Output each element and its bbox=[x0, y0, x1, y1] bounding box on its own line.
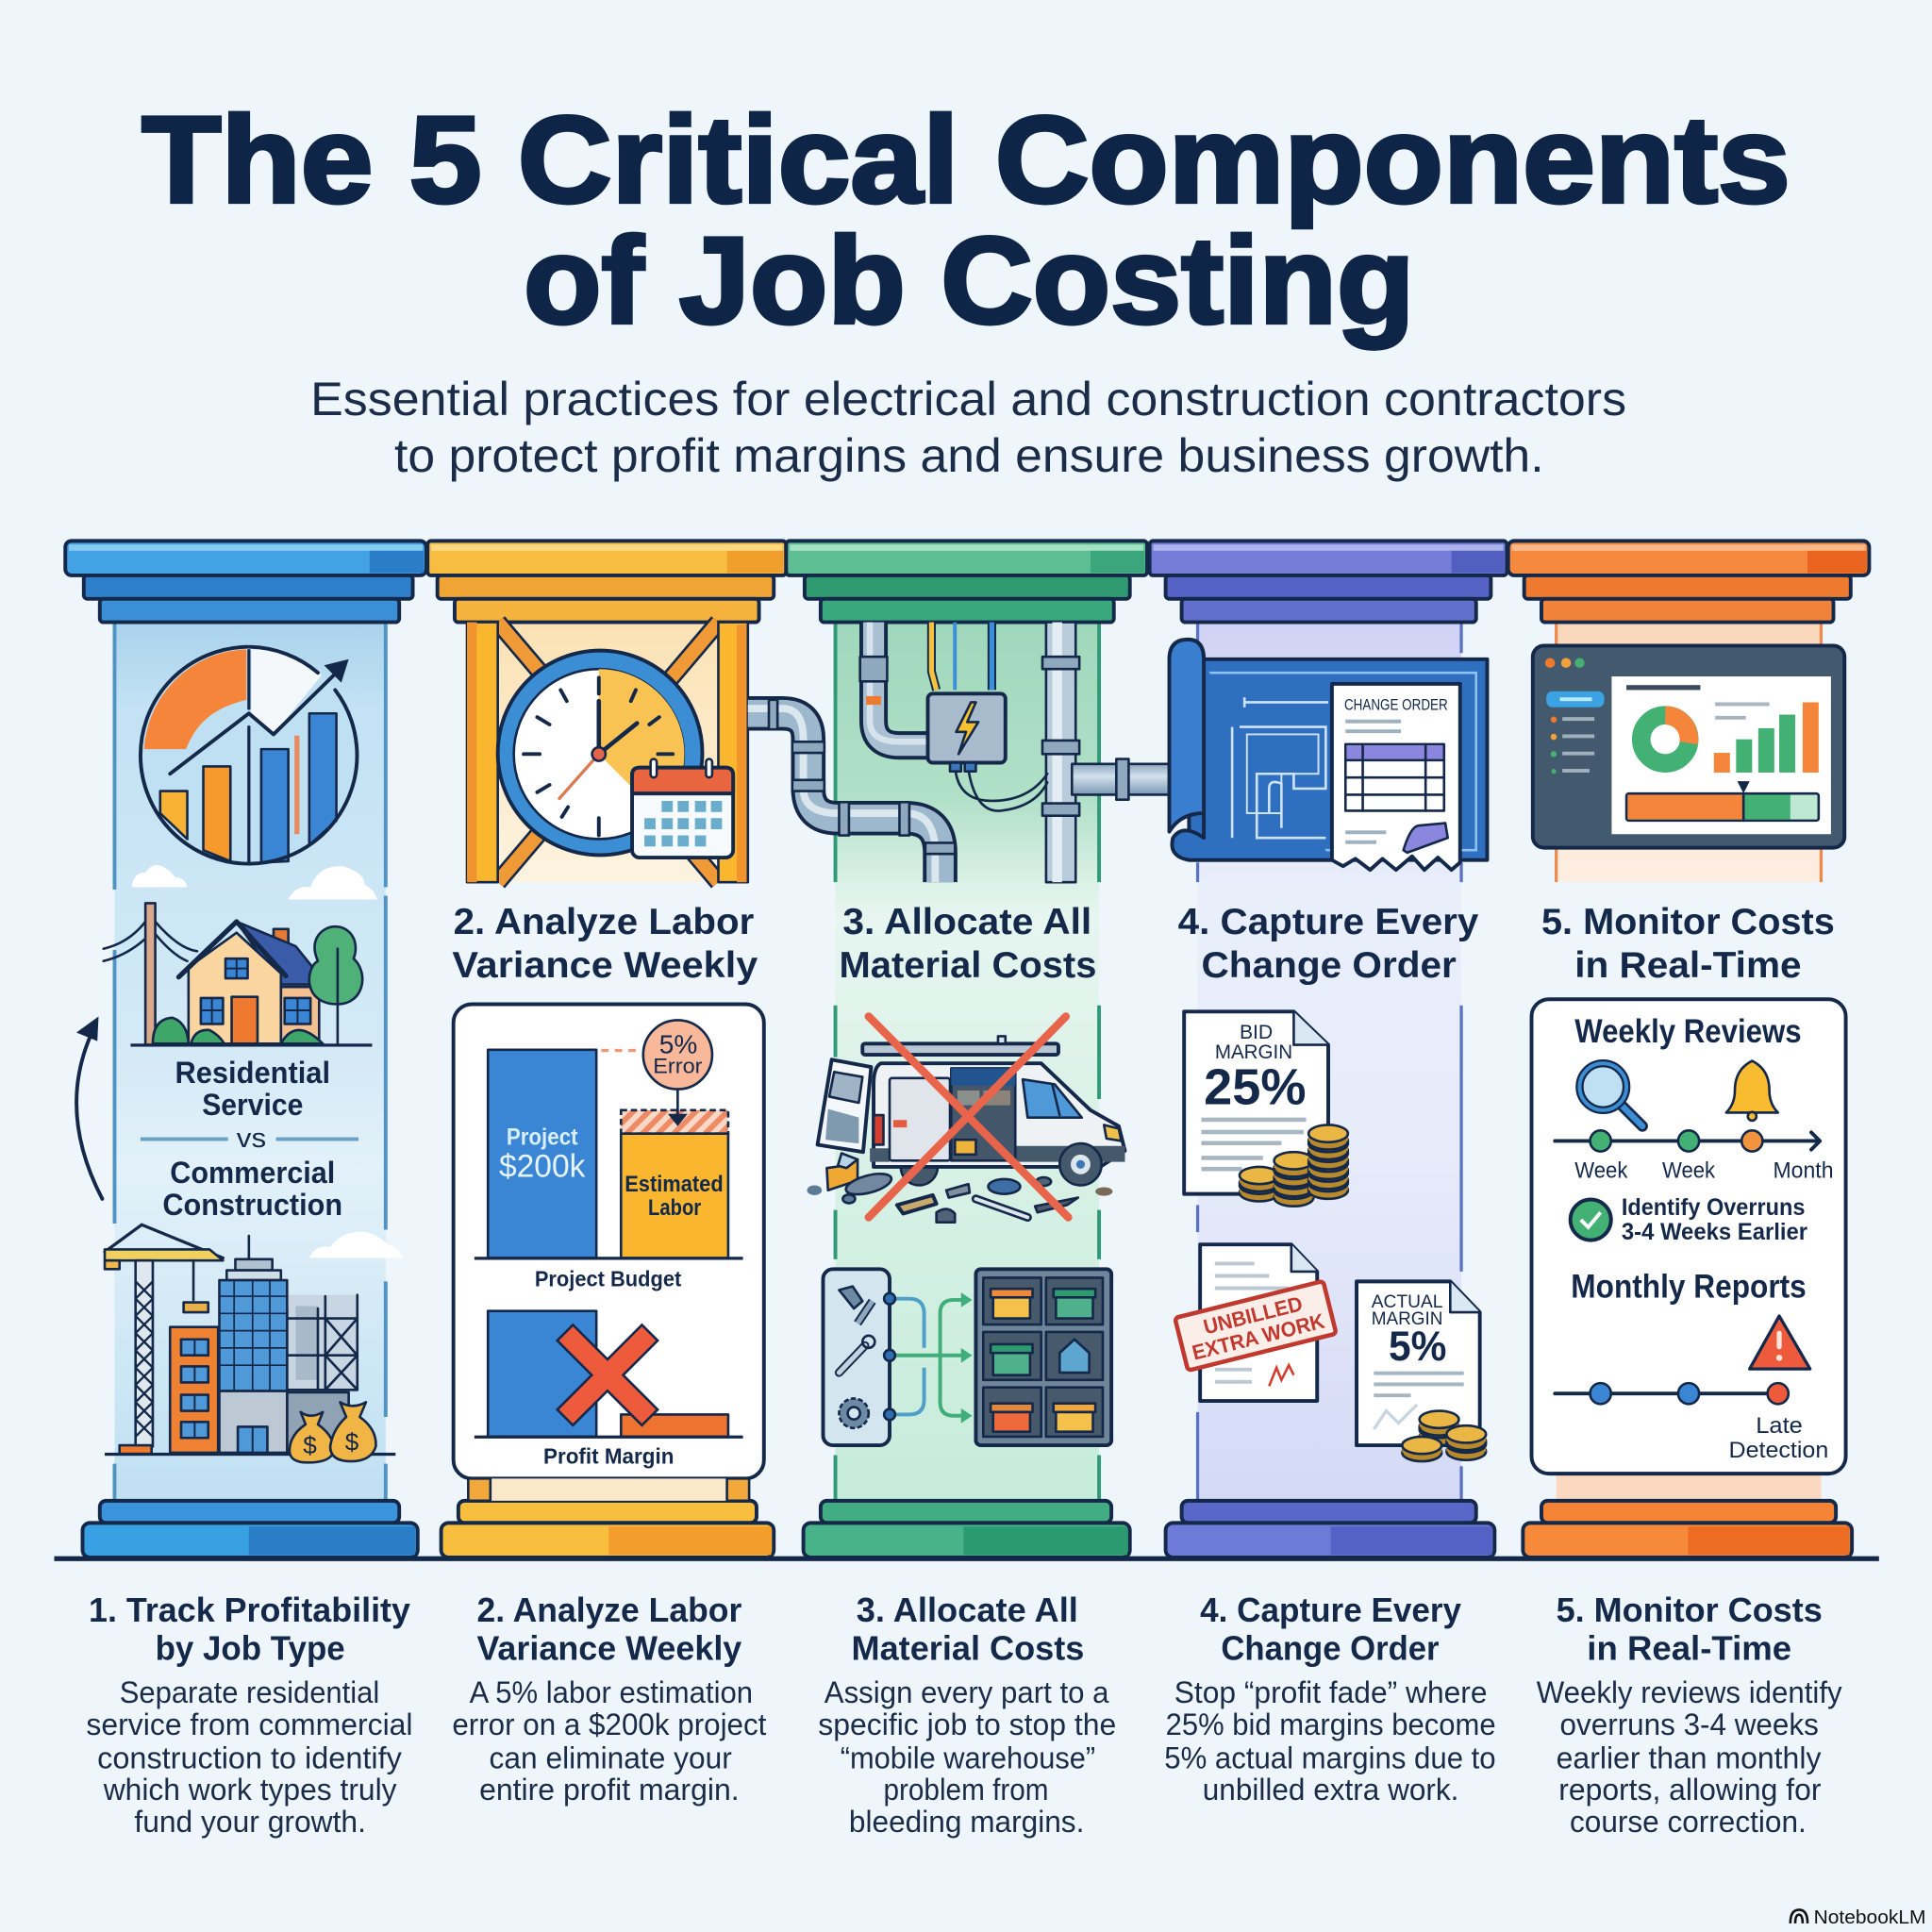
label: late detection bbox=[1728, 1413, 1828, 1463]
text block: 4. capture change orders: 5% actual margins due to bbox=[1164, 1740, 1496, 1774]
bases for all columns bbox=[83, 1501, 1852, 1557]
panel: parts allocated to shelves bbox=[823, 1269, 1111, 1445]
callout: 5% error: 5% bbox=[659, 1030, 697, 1059]
panel: column 4 blueprint bbox=[1170, 640, 1487, 870]
heading: column 4 upper: 4. Capture Every bbox=[1178, 902, 1479, 942]
text block: 3. allocate material costs: specific job to stop the bbox=[818, 1707, 1116, 1741]
icon: calendar bbox=[632, 759, 733, 858]
bar chart: project budget bbox=[475, 1050, 743, 1260]
capital: column 3 green bbox=[786, 541, 1147, 623]
bar chart: project budget: Labor bbox=[648, 1195, 702, 1221]
text: residential vs commercial bbox=[141, 1055, 358, 1222]
icon: utility pole and wires bbox=[104, 903, 197, 1045]
callout: 5% error bbox=[601, 1020, 712, 1126]
conduit pipe from capital to box bbox=[860, 623, 930, 745]
bar chart: profit margin bbox=[475, 1311, 743, 1439]
text: residential vs commercial: Residential bbox=[175, 1055, 330, 1090]
heading: weekly reviews: Weekly Reviews bbox=[1574, 1013, 1802, 1050]
notebooklm watermark: NotebookLM bbox=[1814, 1907, 1925, 1928]
icon: warning triangle bbox=[1750, 1316, 1810, 1369]
label: project budget: Project Budget bbox=[535, 1267, 682, 1291]
icon: clouds bbox=[132, 865, 403, 1258]
callout: 5% error: Error bbox=[653, 1055, 703, 1078]
text block: 5. monitor real-time costs: course correction. bbox=[1570, 1804, 1807, 1839]
wires below junction box bbox=[955, 761, 1047, 811]
title bbox=[142, 91, 1790, 349]
text block: 5. monitor real-time costs: earlier than monthly bbox=[1557, 1740, 1822, 1774]
text block: 5. monitor real-time costs: in Real-Time bbox=[1587, 1628, 1791, 1667]
document: bid margin 25%: 25% bbox=[1204, 1059, 1306, 1115]
stamp: unbilled extra work: EXTRA WORK bbox=[1190, 1309, 1327, 1365]
text block: 5. monitor real-time costs: reports, allowing for bbox=[1558, 1772, 1822, 1807]
heading: column 5 upper: in Real-Time bbox=[1574, 945, 1802, 986]
heading: column 2 upper: Variance Weekly bbox=[452, 945, 758, 986]
text block: 1. track profitability: construction to identify bbox=[97, 1740, 402, 1774]
text block: 5. monitor real-time costs bbox=[1537, 1591, 1842, 1839]
text block: 4. capture change orders bbox=[1164, 1591, 1496, 1807]
icon: city buildings bbox=[105, 1236, 395, 1456]
icon: van bbox=[818, 1036, 1124, 1185]
text block: 2. analyze labor variance: can eliminate your bbox=[490, 1740, 732, 1774]
text block: 1. track profitability: service from commercial bbox=[86, 1707, 413, 1741]
text block: 2. analyze labor variance bbox=[452, 1591, 766, 1807]
connectors and arrows bbox=[890, 1299, 967, 1416]
heading: column 3 upper: 3. Allocate All bbox=[842, 902, 1091, 942]
icon: clock bbox=[498, 651, 702, 855]
text: residential vs commercial: vs bbox=[237, 1124, 266, 1154]
text block: 5. monitor real-time costs: 5. Monitor Costs bbox=[1557, 1591, 1823, 1629]
text block: 1. track profitability: which work types truly bbox=[103, 1772, 397, 1807]
heading: column 2 upper bbox=[452, 902, 758, 986]
tools panel bbox=[823, 1269, 895, 1445]
panel: labor variance board bbox=[454, 1004, 764, 1478]
text block: 3. allocate material costs: bleeding margins. bbox=[849, 1804, 1084, 1839]
text: residential vs commercial: Service bbox=[202, 1087, 303, 1122]
icon: coin stacks bbox=[1240, 1124, 1348, 1207]
stamp: unbilled extra work: UNBILLED bbox=[1201, 1291, 1305, 1339]
document: actual margin 5%: ACTUAL bbox=[1372, 1291, 1443, 1312]
text block: 2. analyze labor variance: error on a $200k project bbox=[452, 1707, 766, 1741]
label: profit margin: Profit Margin bbox=[543, 1444, 674, 1469]
bar chart: project budget: $200k bbox=[499, 1148, 586, 1184]
column shafts bbox=[114, 623, 1821, 1501]
donut chart bbox=[1641, 715, 1690, 763]
heading: column 3 upper bbox=[839, 902, 1096, 986]
document: bid margin 25%: MARGIN bbox=[1215, 1041, 1292, 1063]
bar chart: project budget: Project bbox=[507, 1124, 578, 1150]
capital: column 4 purple bbox=[1150, 541, 1507, 623]
text block: 3. allocate material costs bbox=[818, 1591, 1116, 1839]
subtitle bbox=[310, 373, 1626, 482]
icon: scattered debris bbox=[808, 1154, 1112, 1223]
icon: bell bbox=[1726, 1061, 1778, 1121]
text block: 2. analyze labor variance: Variance Weekly bbox=[476, 1628, 742, 1667]
timeline: weekly: Week bbox=[1662, 1158, 1716, 1184]
vertical pipe right bbox=[1042, 623, 1079, 882]
text block: 4. capture change orders: 4. Capture Every bbox=[1200, 1591, 1462, 1629]
ground line bbox=[54, 1557, 1879, 1561]
text block: 4. capture change orders: Stop “profit fade” where bbox=[1174, 1674, 1487, 1709]
title: The 5 Critical Components bbox=[142, 91, 1790, 228]
text block: 3. allocate material costs: problem from bbox=[883, 1772, 1049, 1807]
text block: 1. track profitability: by Job Type bbox=[156, 1628, 345, 1667]
text block: 5. monitor real-time costs: Weekly reviews identify bbox=[1537, 1674, 1842, 1709]
pipe: column 2 to column 3 bbox=[748, 700, 955, 882]
label: late detection: Late bbox=[1756, 1413, 1803, 1439]
arrow: residential to commercial curve bbox=[76, 1017, 102, 1199]
document: bid margin 25%: BID bbox=[1240, 1022, 1273, 1043]
panel: column 1 job type illustrations bbox=[76, 647, 403, 1462]
panel: weekly vs monthly review board bbox=[1532, 999, 1846, 1474]
text block: 4. capture change orders: Change Order bbox=[1221, 1628, 1440, 1667]
panel: column 3 pipes and junction box bbox=[748, 623, 1173, 882]
icon: junction box bbox=[928, 693, 1006, 772]
panel: column 5 monitor dashboard bbox=[1533, 645, 1844, 848]
document: actual margin 5%: MARGIN bbox=[1372, 1308, 1442, 1329]
icon: money bags bbox=[290, 1402, 375, 1462]
text block: 4. capture change orders: unbilled extra work. bbox=[1203, 1772, 1458, 1807]
subtitle: to protect profit margins and ensure business growth. bbox=[394, 429, 1544, 482]
change order document: CHANGE ORDER bbox=[1344, 696, 1448, 713]
heading: column 5 upper: 5. Monitor Costs bbox=[1541, 902, 1835, 942]
text block: 4. capture change orders: 25% bid margins become bbox=[1166, 1707, 1496, 1741]
wires bbox=[931, 623, 937, 690]
document: actual margin 5% bbox=[1357, 1281, 1480, 1445]
heading: monthly reports: Monthly Reports bbox=[1571, 1268, 1807, 1305]
text block: 2. analyze labor variance: A 5% labor estimation bbox=[470, 1674, 753, 1709]
text block: 1. track profitability: fund your growth. bbox=[134, 1804, 366, 1839]
icon: house bbox=[130, 922, 372, 1047]
title: of Job Costing bbox=[524, 211, 1414, 349]
icon: small coin stack bbox=[1402, 1411, 1486, 1461]
text block: 3. allocate material costs: 3. Allocate All bbox=[857, 1591, 1078, 1629]
timeline: weekly: Week bbox=[1574, 1158, 1628, 1184]
text: residential vs commercial: Commercial bbox=[170, 1155, 335, 1190]
icon: construction crane bbox=[105, 1224, 223, 1454]
document: bid margin 25% bbox=[1184, 1011, 1328, 1194]
heading: column 2 upper: 2. Analyze Labor bbox=[454, 902, 754, 942]
icon: money bags: $ bbox=[303, 1431, 317, 1459]
pipe: column 3 to blueprint bbox=[1072, 759, 1173, 800]
text block: 1. track profitability: 1. Track Profitability bbox=[89, 1591, 411, 1629]
document: actual margin 5%: 5% bbox=[1389, 1324, 1446, 1370]
panel: bid vs actual margin bbox=[1174, 1011, 1486, 1461]
capital: column 5 orange bbox=[1508, 541, 1869, 623]
heading: column 4 upper: Change Order bbox=[1201, 945, 1457, 986]
heading: column 4 upper bbox=[1178, 902, 1479, 986]
progress bar bbox=[1626, 781, 1819, 821]
panel: column 2 clock and scaffold bbox=[467, 623, 748, 882]
icon: pie and bar chart bbox=[141, 647, 358, 864]
panel: mobile warehouse van bbox=[808, 1017, 1124, 1223]
timeline: monthly bbox=[1555, 1383, 1789, 1404]
stamp: unbilled extra work bbox=[1174, 1281, 1336, 1371]
text block: 2. analyze labor variance: entire profit margin. bbox=[479, 1772, 740, 1807]
text block: 3. allocate material costs: Material Costs bbox=[852, 1628, 1084, 1667]
change order document bbox=[1332, 684, 1460, 870]
icon: red cross-out bbox=[869, 1017, 1068, 1217]
text block: 5. monitor real-time costs: overruns 3-4 weeks bbox=[1560, 1707, 1819, 1741]
label: late detection: Detection bbox=[1728, 1438, 1828, 1463]
text block: 3. allocate material costs: “mobile warehouse” bbox=[841, 1740, 1095, 1774]
callout: identify overruns bbox=[1571, 1195, 1807, 1245]
text: residential vs commercial: Construction bbox=[162, 1187, 342, 1222]
capital: column 2 yellow bbox=[427, 541, 786, 623]
capital: column 1 blue bbox=[65, 541, 426, 623]
shelving unit bbox=[975, 1269, 1111, 1445]
timeline: weekly: Month bbox=[1774, 1158, 1834, 1184]
scaffold frame bbox=[467, 623, 748, 882]
heading: column 3 upper: Material Costs bbox=[839, 945, 1096, 986]
subtitle: Essential practices for electrical and construction contractors bbox=[310, 373, 1626, 425]
icon: magnifier bbox=[1579, 1063, 1642, 1126]
callout: identify overruns: Identify Overruns bbox=[1622, 1195, 1805, 1221]
heading: column 5 upper bbox=[1541, 902, 1835, 986]
text block: 1. track profitability: Separate residential bbox=[120, 1674, 379, 1709]
text block: 3. allocate material costs: Assign every part to a bbox=[824, 1674, 1109, 1709]
document: unbilled extra work bbox=[1200, 1244, 1317, 1401]
timeline: weekly bbox=[1555, 1130, 1834, 1184]
text block: 2. analyze labor variance: 2. Analyze Labor bbox=[476, 1591, 741, 1629]
column 2 pedestal bbox=[468, 1478, 749, 1501]
bar chart: project budget: Estimated bbox=[625, 1172, 724, 1197]
dashboard bars bbox=[1714, 702, 1819, 773]
icon: money bags: $ bbox=[345, 1427, 359, 1456]
text block: 1. track profitability bbox=[86, 1591, 413, 1839]
callout: identify overruns: 3-4 Weeks Earlier bbox=[1622, 1220, 1807, 1245]
